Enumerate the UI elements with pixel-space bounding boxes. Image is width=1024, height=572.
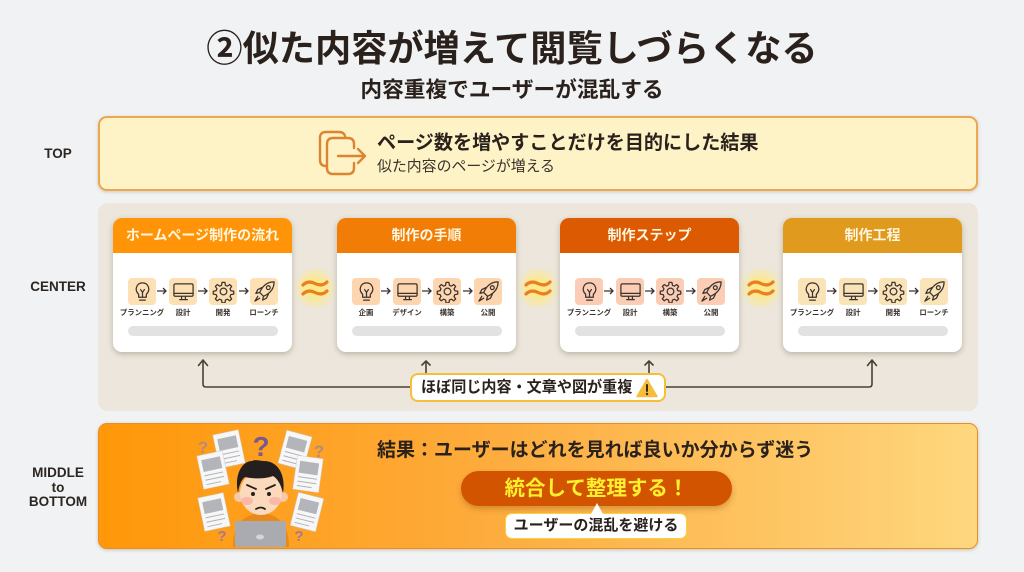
- card: 制作工程: ローンチ: [919, 308, 949, 317]
- card header: 制作工程: [844, 227, 900, 243]
- card: ホームページ制作の流れ: 開発: [216, 308, 230, 317]
- card: 制作工程: 開発: [886, 308, 900, 317]
- question marks: ?: [314, 442, 324, 461]
- step: planning: [128, 278, 156, 305]
- card: 制作の手順: 公開: [481, 308, 495, 317]
- step: launch: [920, 278, 948, 305]
- label: MIDDLE to BOTTOM: MIDDLE: [32, 465, 84, 480]
- panel: center: [98, 203, 978, 411]
- step: development: [879, 278, 907, 305]
- arrow: [463, 288, 473, 294]
- card: 制作ステップ: 公開: [704, 308, 718, 317]
- similar sign 3: [739, 266, 783, 310]
- card: ホームページ制作の流れ: [113, 218, 292, 352]
- card header: [560, 218, 739, 253]
- call to action pill: [461, 471, 732, 506]
- arrow: [868, 288, 878, 294]
- step: development: [656, 278, 684, 305]
- similar sign 1: [293, 266, 337, 310]
- person: [233, 460, 289, 547]
- similar sign 2: [516, 266, 560, 310]
- step: design: [393, 278, 421, 305]
- call to action pill: 統合して整理する！: [505, 477, 688, 500]
- card: ホームページ制作の流れ: ローンチ: [249, 308, 279, 317]
- top heading: ページ数を増やすことだけを目的にした結果: [377, 133, 758, 154]
- illustration: confused user with documents: [196, 429, 324, 547]
- card header: 制作ステップ: [608, 227, 692, 243]
- step: development: [433, 278, 461, 305]
- step: planning: [352, 278, 380, 305]
- callout pointer: [591, 503, 603, 514]
- panel: top: [98, 116, 978, 191]
- icon: warning: [636, 378, 658, 398]
- question marks: ?: [252, 431, 270, 462]
- step: development: [209, 278, 237, 305]
- card: 制作工程: [783, 218, 962, 352]
- card: 制作の手順: 構築: [440, 308, 454, 317]
- card: 制作ステップ: 構築: [663, 308, 677, 317]
- label: TOP: TOP: [44, 146, 72, 161]
- arrow: [381, 288, 391, 294]
- step labels: プランニング: [790, 308, 834, 317]
- bottom heading: 結果：ユーザーはどれを見れば良いか分からず迷う: [377, 440, 813, 461]
- callout text: ほぼ同じ内容・文章や図が重複: [421, 379, 632, 396]
- card: 制作ステップ: [560, 218, 739, 352]
- card header: [337, 218, 516, 253]
- panel: bottom: [98, 423, 978, 549]
- step labels: 企画: [359, 308, 373, 317]
- callout: duplication note: [410, 373, 666, 402]
- arrow: [239, 288, 249, 294]
- step: design: [839, 278, 867, 305]
- icon: duplicate pages with arrow: [318, 130, 366, 176]
- arrow: [909, 288, 919, 294]
- card: 制作工程: 設計: [846, 308, 860, 317]
- card header: ホームページ制作の流れ: [126, 227, 279, 243]
- label: MIDDLE to BOTTOM: [29, 465, 87, 509]
- card: 制作の手順: デザイン: [392, 308, 422, 317]
- subtitle: 内容重複でユーザーが混乱する: [360, 77, 664, 102]
- question marks: [198, 431, 324, 545]
- step: design: [169, 278, 197, 305]
- step: planning: [575, 278, 603, 305]
- step: planning: [798, 278, 826, 305]
- callout: avoid confusion: [505, 513, 687, 539]
- label: MIDDLE to BOTTOM: to: [52, 480, 64, 494]
- arrow: [198, 288, 208, 294]
- documents: [213, 430, 245, 468]
- arrows: duplication connectors to cards: [198, 359, 878, 388]
- card: ホームページ制作の流れ: 設計: [176, 308, 190, 317]
- step: launch: [474, 278, 502, 305]
- question marks: ?: [198, 438, 208, 457]
- arrow: [604, 288, 614, 294]
- card header: [113, 218, 292, 253]
- card header: [783, 218, 962, 253]
- question marks: ?: [294, 528, 304, 545]
- card: 制作ステップ: 設計: [623, 308, 637, 317]
- title: ②似た内容が増えて閲覧しづらくなる: [206, 28, 818, 69]
- arrow: [422, 288, 432, 294]
- step: design: [616, 278, 644, 305]
- step: launch: [250, 278, 278, 305]
- callout: avoid confusion: ユーザーの混乱を避ける: [514, 517, 678, 534]
- top subtext: 似た内容のページが増える: [377, 159, 555, 175]
- label: MIDDLE to BOTTOM: BOTTOM: [29, 494, 87, 509]
- arrow: [827, 288, 837, 294]
- arrow: [645, 288, 655, 294]
- card header: 制作の手順: [392, 227, 462, 243]
- step: launch: [697, 278, 725, 305]
- question marks: ?: [217, 528, 227, 545]
- arrow: [686, 288, 696, 294]
- step labels: プランニング: [120, 308, 164, 317]
- step labels: プランニング: [567, 308, 611, 317]
- label: CENTER: CENTER: [30, 279, 86, 294]
- arrow: [157, 288, 167, 294]
- card: 制作の手順: [337, 218, 516, 352]
